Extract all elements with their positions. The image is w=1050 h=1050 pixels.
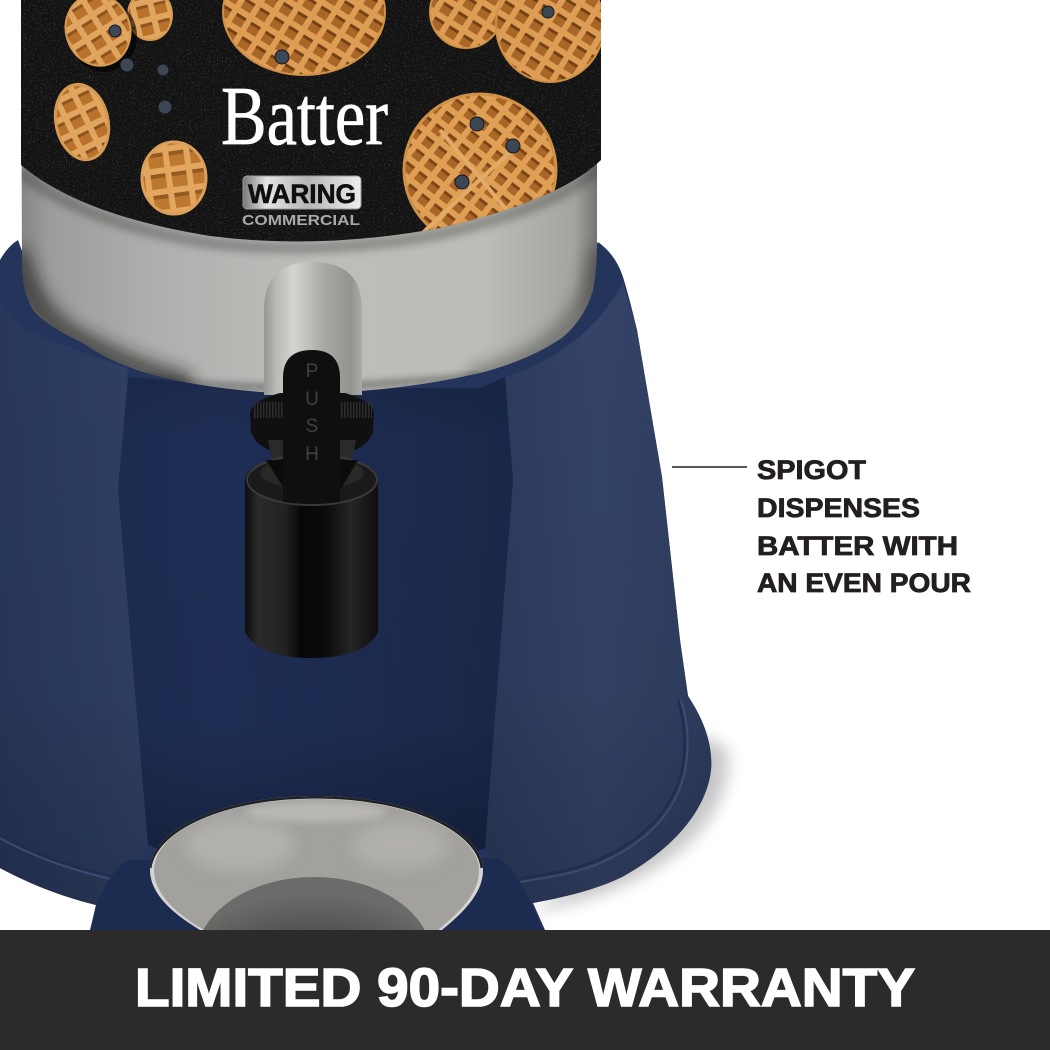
callout: spigot text: BATTER WITH (757, 531, 958, 561)
steel shading (15, 166, 601, 388)
callout: spigot text: SPIGOT (757, 455, 867, 485)
push lever lettering (305, 361, 319, 465)
bowl holder tabs (91, 860, 215, 930)
ring collar highlight (268, 440, 356, 460)
waffle group (49, 0, 604, 246)
push lever lettering: S (306, 416, 318, 437)
bowl interior (150, 796, 483, 930)
steel tube (264, 262, 362, 395)
push lever lettering: U (305, 389, 319, 410)
drip tray bowl (150, 796, 483, 930)
Waring Commercial logo: WARING (248, 179, 356, 209)
warranty banner (0, 930, 1050, 1050)
center front panel (118, 377, 513, 880)
foot ridge right (512, 700, 685, 880)
bowl floor (203, 877, 425, 930)
banner background (0, 930, 1050, 1050)
dispenser steel cylinder (15, 0, 604, 393)
base shadow (530, 735, 728, 912)
brand script: Batter: Batter (221, 70, 388, 163)
callout: spigot text: AN EVEN POUR (757, 568, 971, 598)
push lever lettering: P (306, 361, 318, 382)
push lever lettering: H (305, 444, 319, 465)
printed black label (21, 0, 604, 250)
label background (21, 0, 601, 250)
cup body (245, 465, 378, 658)
steel body (21, 0, 597, 393)
Waring Commercial logo (242, 176, 361, 229)
bowl outer rim (150, 796, 483, 930)
banner text: LIMITED 90-DAY WARRANTY (135, 958, 915, 1018)
right side panel (485, 283, 711, 903)
left side panel (0, 303, 148, 905)
cup top rim (247, 455, 377, 505)
callout: spigot text (757, 455, 971, 598)
Waring Commercial logo: COMMERCIAL (242, 212, 360, 229)
callout: spigot text: DISPENSES (757, 493, 920, 523)
stand base (0, 240, 711, 930)
knurled ring (250, 393, 374, 452)
spigot (245, 262, 378, 658)
base silhouette (0, 240, 711, 930)
callout leader line (672, 466, 747, 468)
foot ridge left (0, 835, 115, 877)
push lever (283, 350, 340, 504)
blueberries (109, 6, 554, 189)
